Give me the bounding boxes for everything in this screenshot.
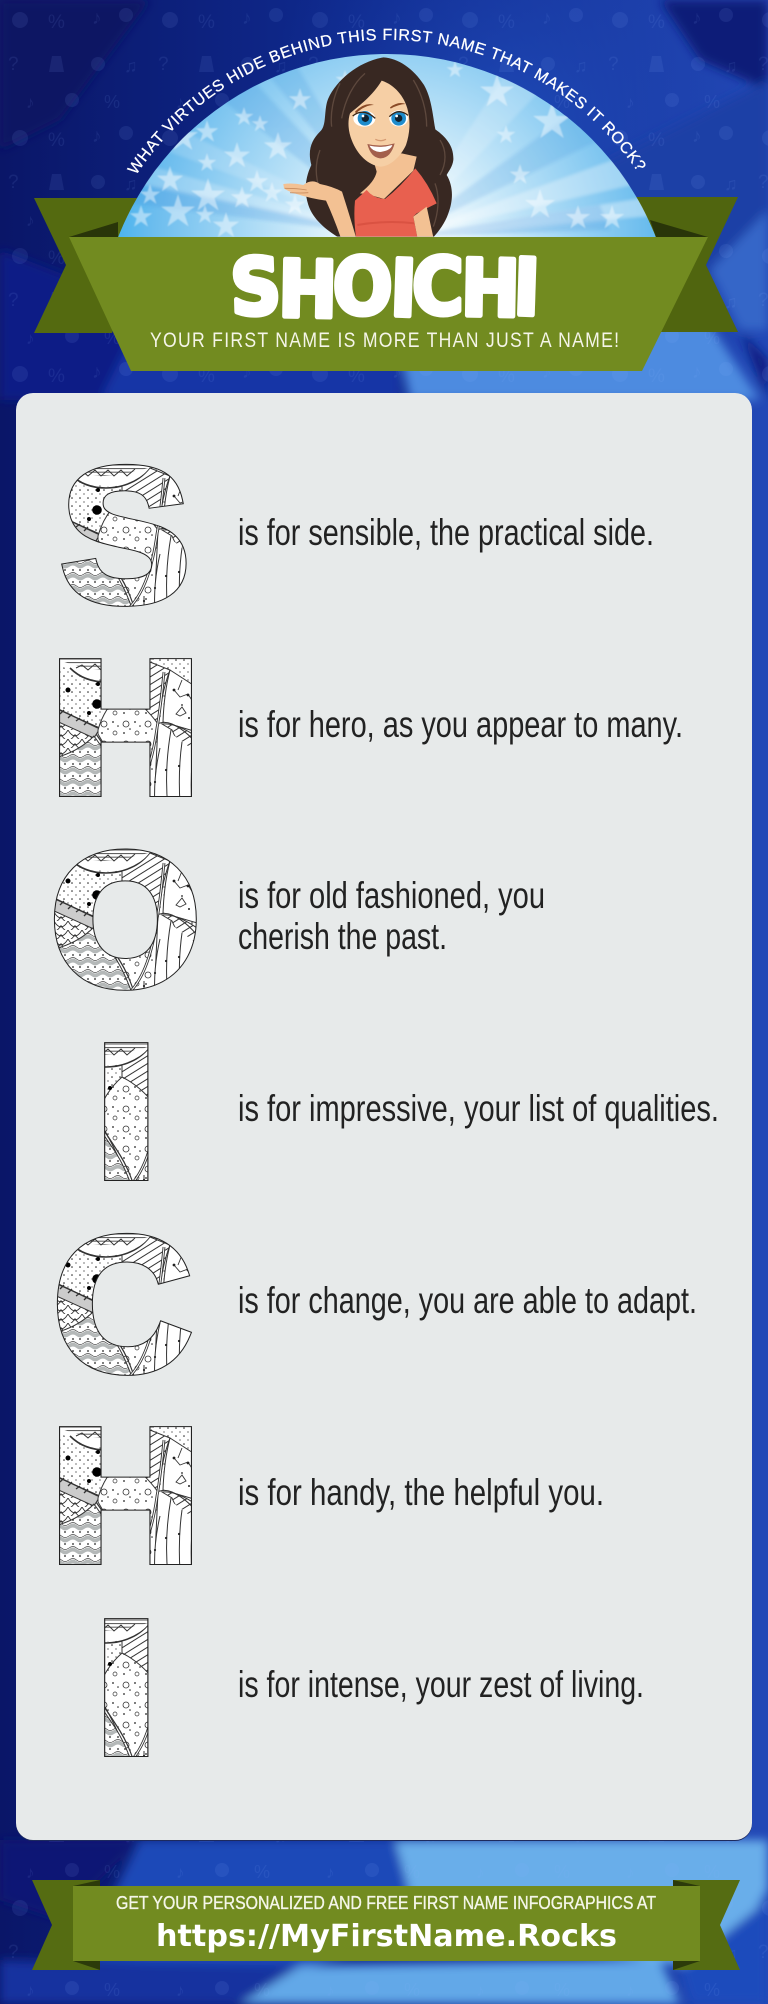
fold: left [69, 222, 118, 237]
ribbon tail: right [636, 197, 738, 332]
letter H: H [52, 1393, 199, 1599]
tagline: YOUR FIRST NAME IS MORE THAN JUST A NAME! [150, 328, 619, 352]
letter S: S [60, 429, 190, 642]
curved heading text: WHAT VIRTUES HIDE BEHIND THIS FIRST NAME THAT MAKES IT ROCK? [126, 28, 646, 173]
name title: SHOICHI [229, 242, 541, 336]
footer ribbon [32, 1880, 740, 1970]
row text: O: cherish the past. [238, 916, 447, 957]
letter S [61, 464, 187, 607]
row text: O: is for old fashioned, you [238, 875, 545, 916]
fold: right [650, 220, 708, 237]
hair [306, 57, 453, 237]
letter I: I [97, 1009, 156, 1215]
footer call to action: GET YOUR PERSONALIZED AND FREE FIRST NAME INFOGRAPHICS AT [116, 1892, 656, 1913]
eyes [353, 111, 375, 127]
letter O: O [52, 818, 199, 1023]
ribbon tail: left [34, 198, 140, 333]
footer URL: https://MyFirstName.Rocks [156, 1919, 617, 1954]
character: woman with long brown hair [283, 57, 453, 237]
dome with starburst [118, 54, 656, 237]
row text: I: is for intense, your zest of living. [238, 1664, 644, 1705]
letter I [104, 1042, 148, 1181]
arm and hand [283, 181, 356, 237]
shirt [354, 168, 437, 237]
eyebrows [355, 104, 374, 113]
letter I [104, 1618, 148, 1757]
row text: S: is for sensible, the practical side. [238, 512, 654, 553]
letter C [56, 1232, 192, 1376]
face [348, 81, 409, 167]
row text: O [238, 875, 545, 957]
panel [16, 393, 752, 1841]
letter H: H [52, 625, 199, 831]
letter H [59, 658, 192, 797]
row text: H: is for handy, the helpful you. [238, 1472, 604, 1513]
letter I: I [97, 1585, 156, 1791]
letter H [59, 1426, 192, 1565]
letter O [54, 848, 197, 991]
arm right [413, 207, 433, 237]
nose [375, 139, 386, 141]
main green ribbon [69, 237, 708, 371]
mouth [367, 143, 395, 158]
neck and chest [360, 153, 417, 199]
letter C: C [53, 1198, 192, 1411]
